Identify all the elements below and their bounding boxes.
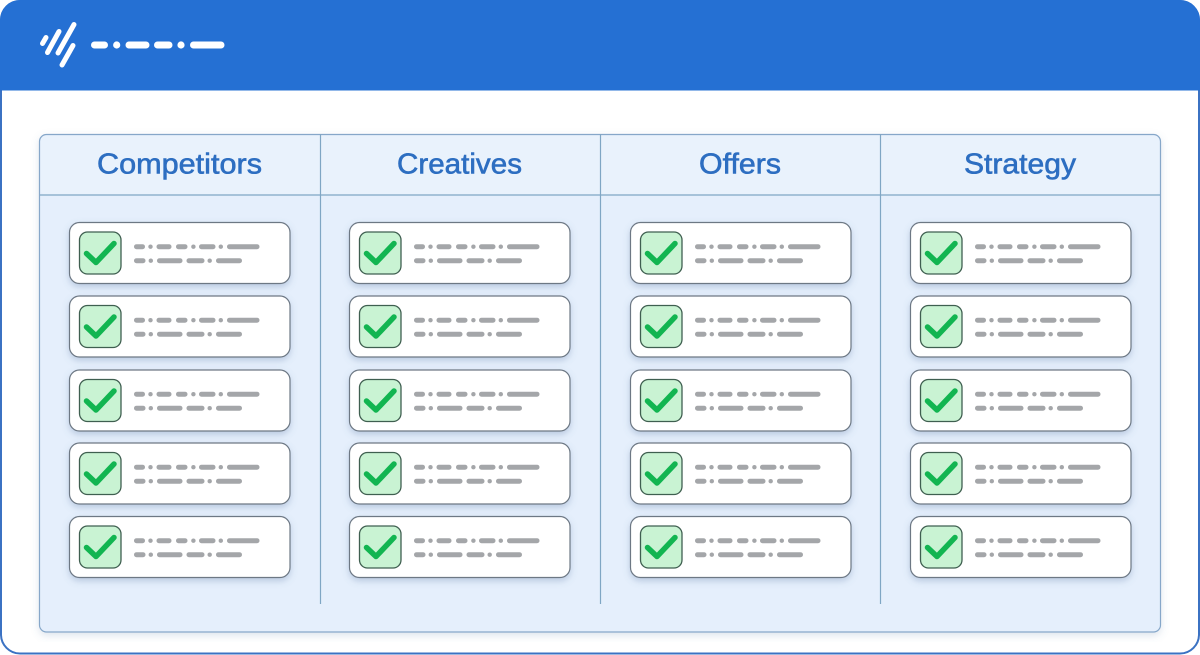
checklist item 3	[910, 370, 1131, 431]
checklist item 2	[910, 296, 1131, 357]
checklist item 5	[70, 516, 290, 578]
checklist item 3	[350, 370, 570, 431]
checklist item 5	[350, 516, 570, 578]
checklist item 3	[70, 370, 290, 431]
checklist item 2	[350, 296, 570, 357]
checklist item 1	[910, 222, 1131, 284]
checklist item 3	[630, 370, 851, 431]
checklist item 4	[350, 443, 570, 504]
checklist item 4	[70, 443, 290, 504]
heading: Competitors: Competitors	[97, 149, 262, 181]
checklist item 5	[630, 516, 851, 578]
checklist item 2	[70, 296, 290, 357]
checklist item 1	[350, 222, 570, 284]
panel: table	[40, 134, 1160, 632]
column: Strategy items	[910, 222, 1131, 578]
checklist item 1	[630, 222, 851, 284]
column: Creatives items	[350, 222, 570, 578]
checklist item 1	[70, 222, 290, 284]
column: Competitors items	[70, 222, 290, 578]
logo wordmark placeholder	[94, 42, 221, 48]
checklist item 5	[910, 516, 1131, 578]
logo mark	[42, 24, 74, 65]
table background	[40, 134, 1160, 632]
heading: Creatives: Creatives	[397, 149, 522, 181]
table header row	[40, 136, 1160, 195]
header bar	[0, 0, 1200, 90]
logo	[42, 24, 221, 65]
heading: Offers: Offers	[699, 149, 781, 181]
heading: Strategy: Strategy	[964, 149, 1077, 181]
checklist item 2	[630, 296, 851, 357]
column: Offers items	[630, 222, 851, 578]
checklist item 4	[910, 443, 1131, 504]
checklist item 4	[630, 443, 851, 504]
